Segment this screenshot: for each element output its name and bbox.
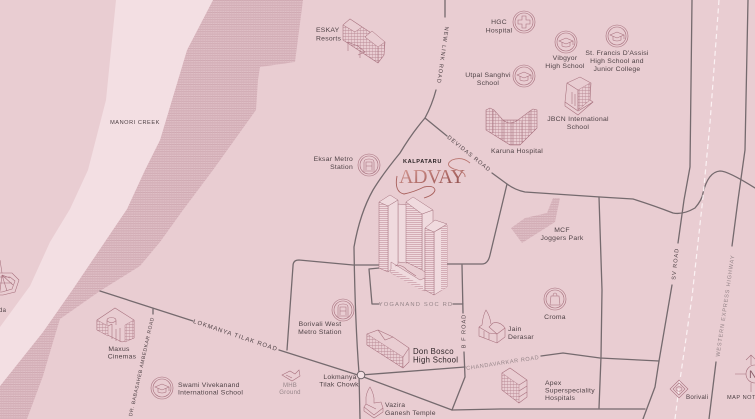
label: Don Bosco High School: Don Bosco (413, 347, 454, 356)
label: Apex Superspeciality Hospitals: Apex (545, 380, 562, 387)
label: Swami Vivekanand International School: International School (178, 390, 243, 396)
project towers illustration (379, 195, 447, 295)
tower one (379, 195, 407, 272)
icon: Vazira Ganesh Temple (364, 387, 383, 418)
label: MHB Ground: Ground (279, 390, 301, 396)
label: Vazira Ganesh Temple: Ganesh Temple (385, 410, 436, 417)
label: St. Francis D'Assisi High School and Junior College: St. Francis D'Assisi (585, 50, 649, 57)
icon: Borivali West Metro Station (332, 299, 354, 321)
label: Croma: Croma (544, 314, 566, 321)
icon: HGC Hospital (513, 11, 535, 33)
label: Karuna Hospital: Karuna Hospital (491, 148, 543, 155)
building icon: Maxus Cinemas (97, 308, 134, 342)
label: Vibgyor High School: Vibgyor (553, 55, 577, 62)
road label: Ambedkar Road: DR. BABASAHEB AMBEDKAR ROAD (128, 317, 156, 417)
label: Swami Vivekanand International School: Swami Vivekanand (178, 382, 240, 389)
icon: compass north (735, 355, 755, 392)
label: JBCN International School: JBCN International (547, 116, 609, 123)
label: Jain Derasar: Jain (508, 326, 521, 333)
road label: Lokmanya Tilak Road: LOKMANYA TILAK ROAD (192, 319, 278, 353)
label: Vibgyor High School: High School (545, 63, 585, 70)
icon: Croma (544, 288, 566, 310)
building icon: Apex Hospital (502, 368, 527, 403)
label: Apex Superspeciality Hospitals: Hospitals (545, 395, 576, 402)
label: St. Francis D'Assisi High School and Junior College: High School and (590, 58, 644, 65)
label: MCF Joggers Park: MCF (554, 227, 570, 234)
label: Maxus Cinemas: Maxus (108, 346, 130, 353)
label: Utpal Sanghvi School: School (477, 80, 499, 87)
tower three (425, 220, 447, 295)
label: Borivali: Borivali (686, 394, 708, 401)
building icon: ESKAY Resorts (343, 19, 385, 63)
icon: St. Francis school (606, 25, 628, 47)
label: Borivali West Metro Station: Metro Station (298, 329, 342, 336)
railway line (675, 0, 719, 419)
road label: Yoganand Soc Rd: YOGANAND SOC RD (379, 302, 453, 308)
hatched mangrove belt (0, 0, 303, 419)
road label: Western Express Highway: WESTERN EXPRESS HIGHWAY (716, 254, 737, 357)
road label: New Link Road: NEW LINK ROAD (435, 26, 449, 84)
label: Maxus Cinemas: Cinemas (108, 354, 137, 361)
icon: Swami Vivekanand School (151, 377, 173, 399)
label: HGC Hospital: Hospital (486, 28, 513, 34)
road label: Chandavarkar Road: CHANDAVARKAR ROAD (466, 355, 540, 372)
label: HGC Hospital: HGC (491, 19, 507, 26)
project logo: Kalpataru Advay: KALPATARU (403, 159, 442, 165)
icon: Eksar Metro Station (358, 154, 380, 176)
label: ESKAY Resorts: ESKAY (316, 27, 339, 34)
marker: Lokmanya Tilak Chowk circle (357, 371, 365, 379)
icon: Utpal Sanghvi School (513, 65, 535, 87)
label: MHB Ground: MHB (283, 383, 297, 389)
building icon: Don Bosco High School (367, 330, 409, 368)
icon: MHB Ground (282, 370, 300, 381)
icon: Jain Derasar temple (479, 310, 505, 343)
road label: SV Road: SV ROAD (671, 248, 681, 280)
label: Vazira Ganesh Temple: Vazira (385, 402, 405, 409)
building icon: JBCN International School (565, 77, 593, 115)
road label: Devidas Road: DEVIDAS ROAD (446, 135, 492, 174)
label: Eksar Metro Station: Station (330, 164, 353, 171)
label: Borivali West Metro Station: Borivali West (299, 321, 341, 328)
label: MCF Joggers Park: Joggers Park (540, 235, 584, 242)
podium (391, 262, 425, 291)
building icon: far-left stadium (0, 260, 19, 295)
icon: MCF Joggers Park hatch (511, 198, 560, 243)
label: Jain Derasar: Derasar (508, 334, 534, 341)
label: Lokmanya Tilak Chowk: Tilak Chowk (319, 382, 359, 389)
label: Lokmanya Tilak Chowk: Lokmanya (323, 374, 357, 381)
label: JBCN International School: School (567, 124, 589, 131)
label: Utpal Sanghvi School: Utpal Sanghvi (465, 72, 511, 79)
creek label: MANORI CREEK (110, 120, 160, 126)
icon: Vibgyor High School (555, 31, 577, 53)
label: Eksar Metro Station: Eksar Metro (314, 156, 353, 163)
label: Don Bosco High School: High School (413, 356, 458, 364)
project logo: Kalpataru Advay (396, 159, 470, 198)
Manori Creek water (0, 0, 213, 386)
label: Apex Superspeciality Hospitals: Superspeciality (545, 388, 595, 394)
project logo: Kalpataru Advay: ADVAY (399, 166, 465, 188)
icon: Borivali station diamond (670, 380, 688, 398)
label: St. Francis D'Assisi High School and Junior College: Junior College (594, 66, 640, 73)
building icon: Karuna Hospital (486, 108, 537, 145)
tower two (406, 197, 433, 272)
label: ESKAY Resorts: Resorts (316, 36, 342, 43)
road label: B F Road: B F ROAD (462, 314, 468, 348)
